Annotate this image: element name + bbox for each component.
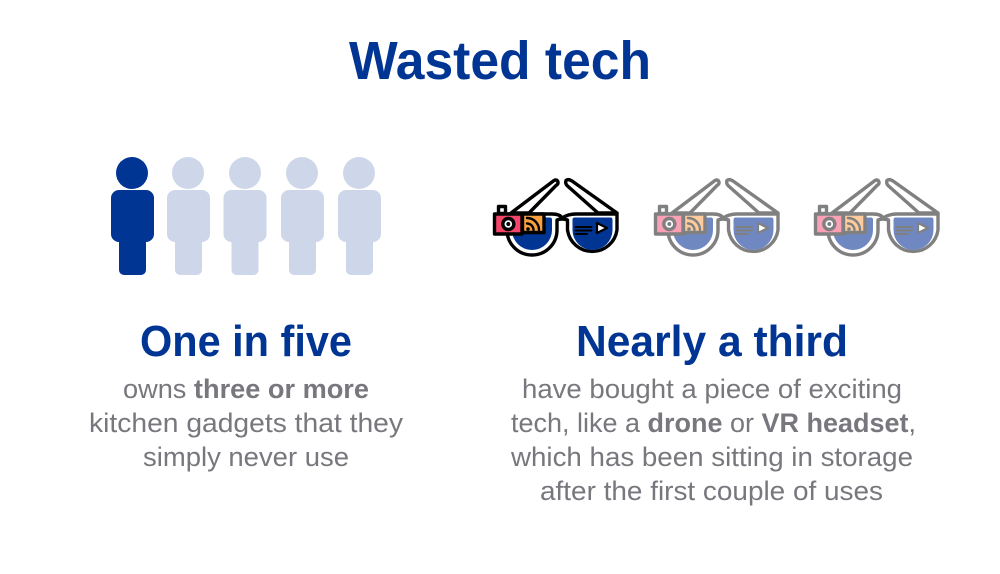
text block: kitchen gadgets: kitchen gadgets that they [89,408,404,438]
heading: one in five: One in five [140,317,352,366]
icon: faded person 4 [281,157,324,275]
text block: kitchen gadgets: simply never use [143,442,349,472]
text block: unused tech [510,374,916,506]
icon: faded person 5 [338,157,381,275]
text block: kitchen gadgets: owns three or more [123,374,369,404]
icon: highlighted person [111,157,154,275]
icon: smart glasses, faded 3 [816,180,938,255]
text block: unused tech: which has been sitting in storage [510,442,913,472]
title: Wasted tech [349,31,651,91]
text block: kitchen gadgets [89,374,404,472]
text block: unused tech: tech, like a drone or VR headset, [511,408,916,438]
icon: faded person 3 [224,157,266,275]
text block: unused tech: after the first couple of uses [540,476,883,506]
text block: unused tech: have bought a piece of exciting [522,374,902,404]
heading: nearly a third: Nearly a third [576,317,848,366]
icon: smart glasses, faded 2 [656,180,778,255]
icon: faded person 2 [167,157,210,275]
icon: smart glasses, highlighted [494,180,617,255]
panel: one in five people pictogram [111,157,381,275]
